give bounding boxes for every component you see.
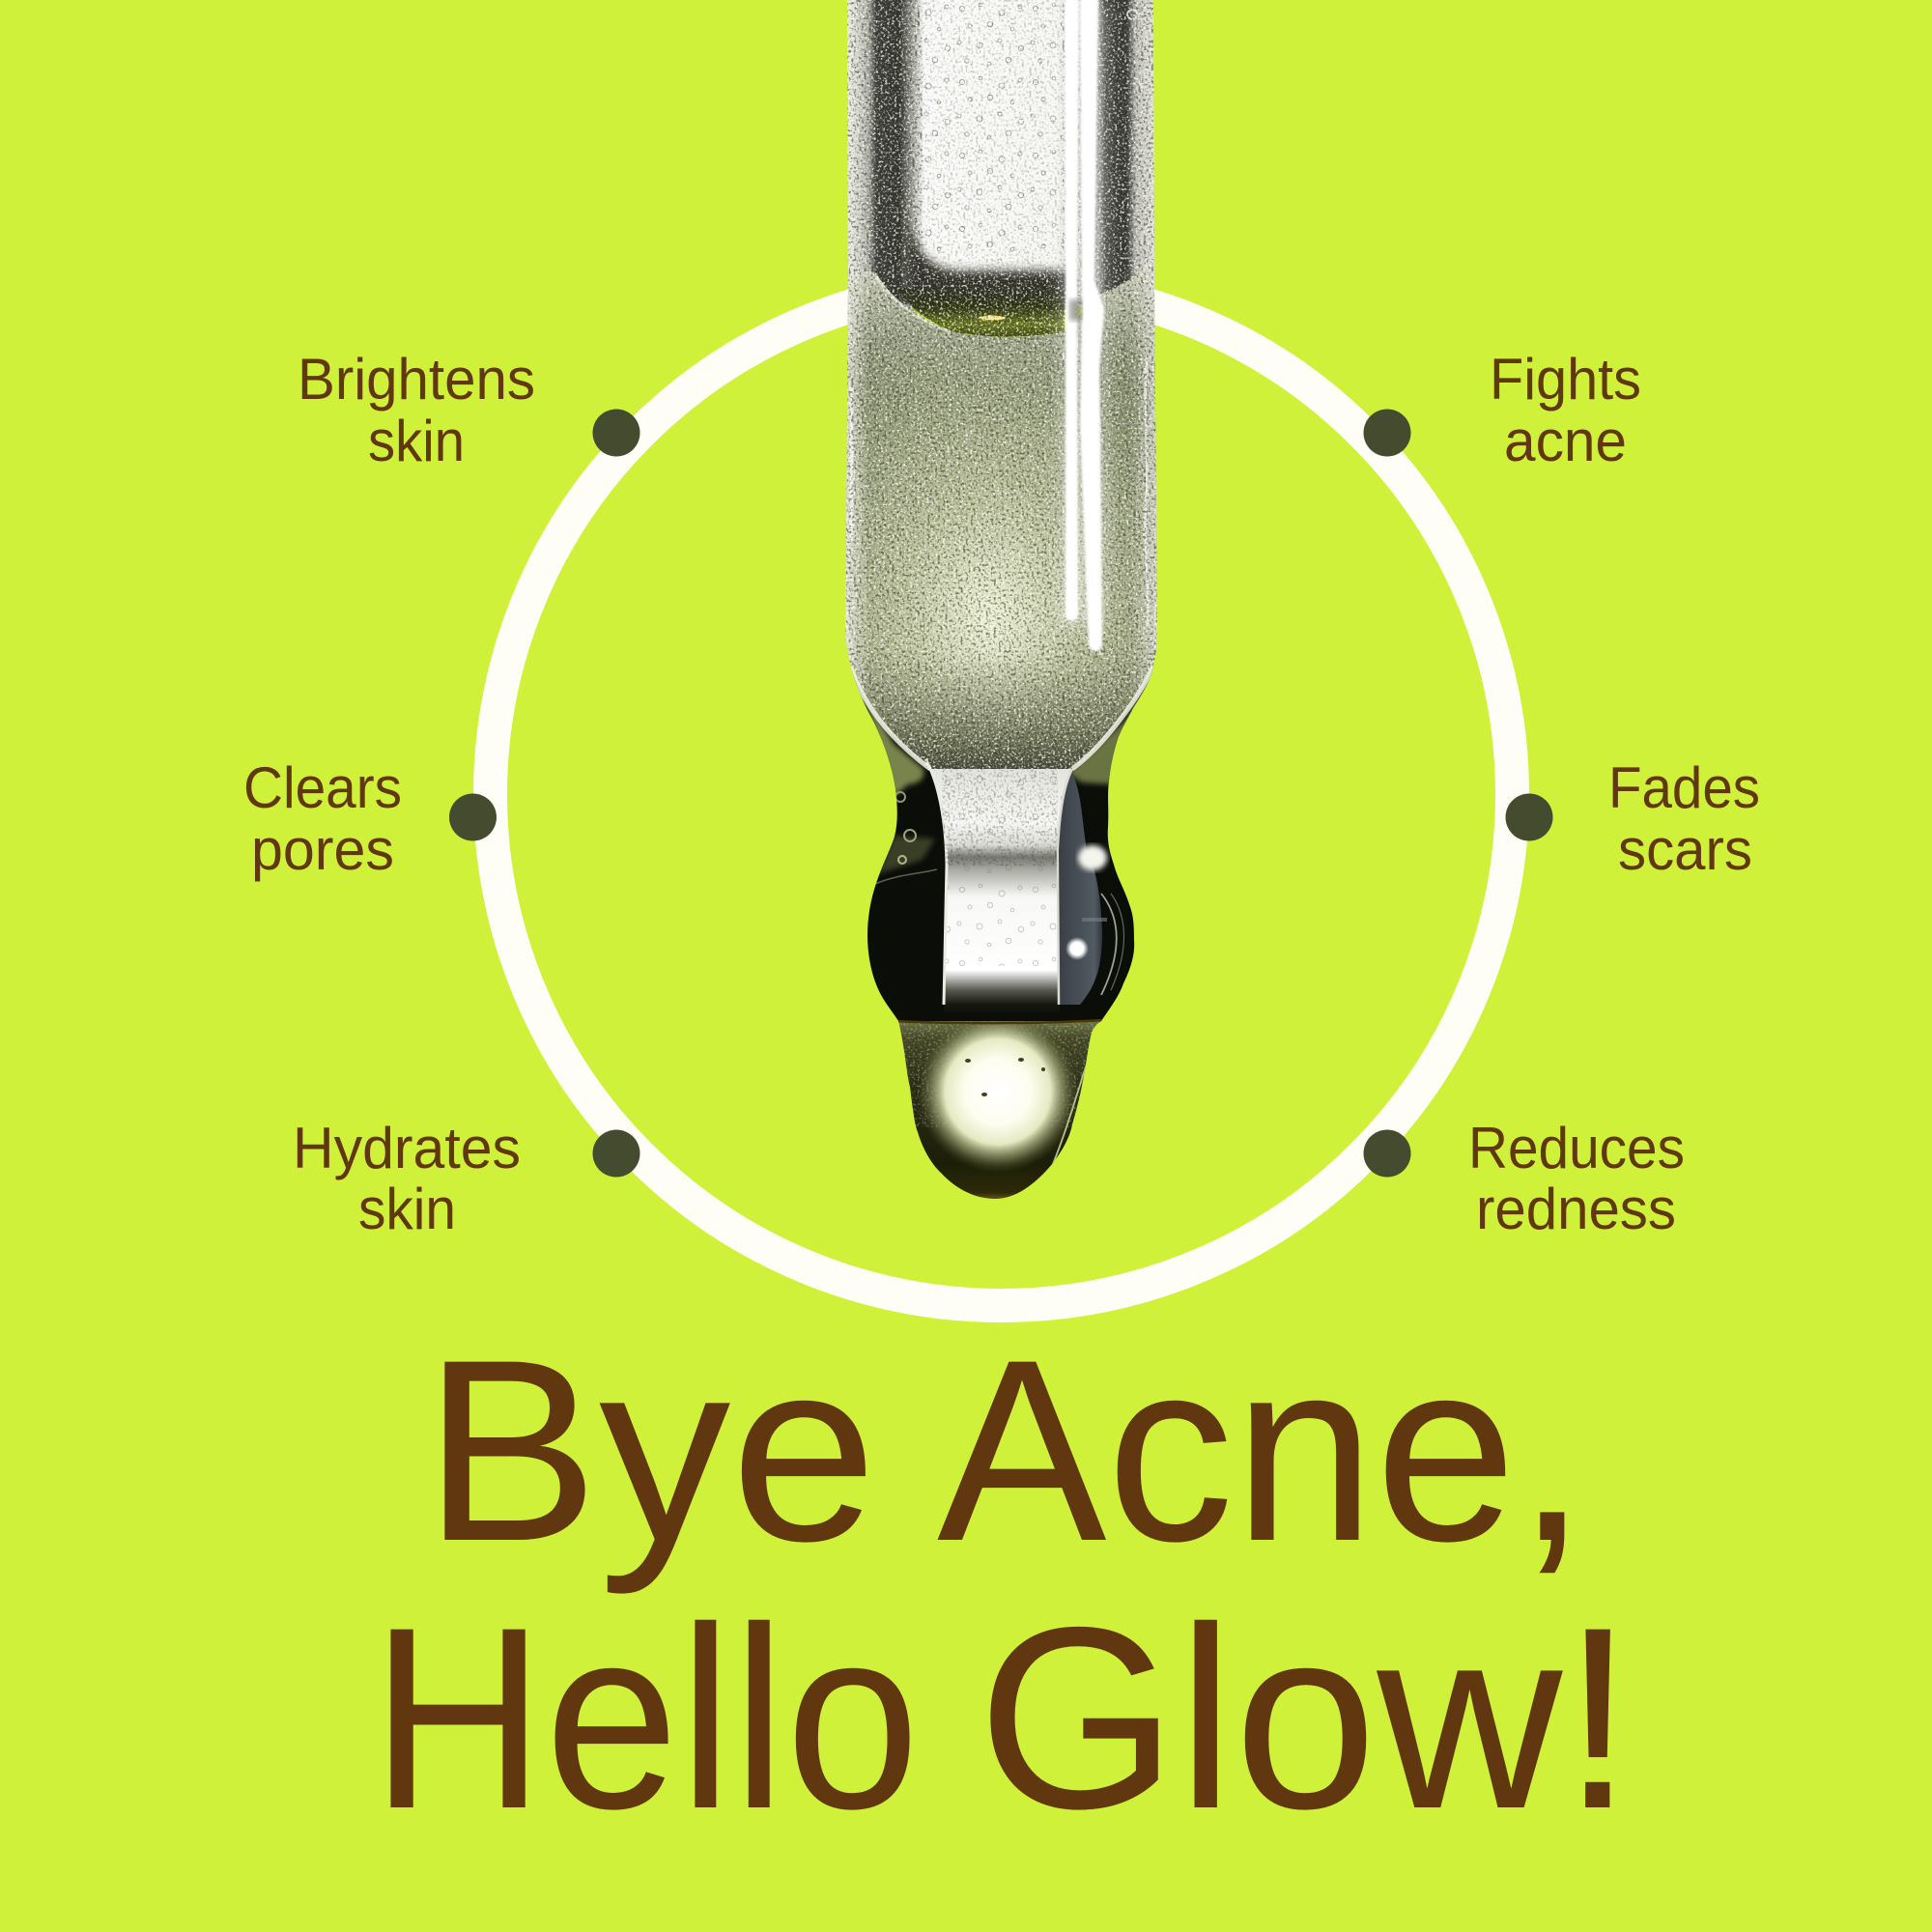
label: Brightens skin: Brightens [298,347,535,412]
label: Reduces redness: Reduces [1468,1116,1685,1180]
dropper upper chamber [840,0,1164,309]
title: Bye [423,1305,877,1597]
label: Fights acne: acne [1504,409,1627,473]
dot: hydrates skin [593,1130,639,1177]
dot: fades scars [1505,794,1553,840]
label: Reduces redness: redness [1476,1177,1676,1241]
bulb white blob and highlight [1065,845,1107,960]
dot: clears pores [449,794,497,840]
title [371,1305,1634,1862]
label: Clears pores [243,755,402,882]
neck inner tube [925,759,1072,1012]
label: Fades scars [1608,755,1760,882]
title: Glow! [978,1573,1634,1862]
white streak [1060,0,1107,651]
title: Hello [371,1573,920,1862]
label: Clears pores: Clears [243,755,402,820]
label: Fades scars: Fades [1608,755,1760,820]
meniscus of oil [874,273,1065,336]
dot: brightens skin [593,410,639,456]
bowl bottom rim [850,667,1153,769]
dot: reduces redness [1364,1130,1410,1177]
label: Reduces redness [1468,1116,1685,1241]
label: Clears pores: pores [251,817,394,882]
label: Brightens skin [298,347,535,473]
dot: fights acne [1364,410,1410,456]
glass rim highlights [845,0,1157,696]
neck dark bulb [851,667,1153,1022]
dropper photo illustration [831,0,1169,1205]
label: Fights acne [1490,347,1641,473]
droplet [898,1021,1101,1199]
label: Hydrates skin: Hydrates [293,1116,521,1180]
label: Hydrates skin: skin [358,1177,456,1241]
infographic canvas [245,0,1758,1810]
label: Hydrates skin [293,1116,521,1241]
liquid body [840,259,1164,769]
white ring [491,284,1513,1306]
droplet top seam [896,1020,1103,1023]
label: Brightens skin: skin [368,409,465,473]
speckle texture on glass [840,0,1164,866]
title: Acne, [937,1305,1587,1595]
label: Fights acne: Fights [1490,347,1641,412]
label: Fades scars: scars [1618,817,1752,882]
